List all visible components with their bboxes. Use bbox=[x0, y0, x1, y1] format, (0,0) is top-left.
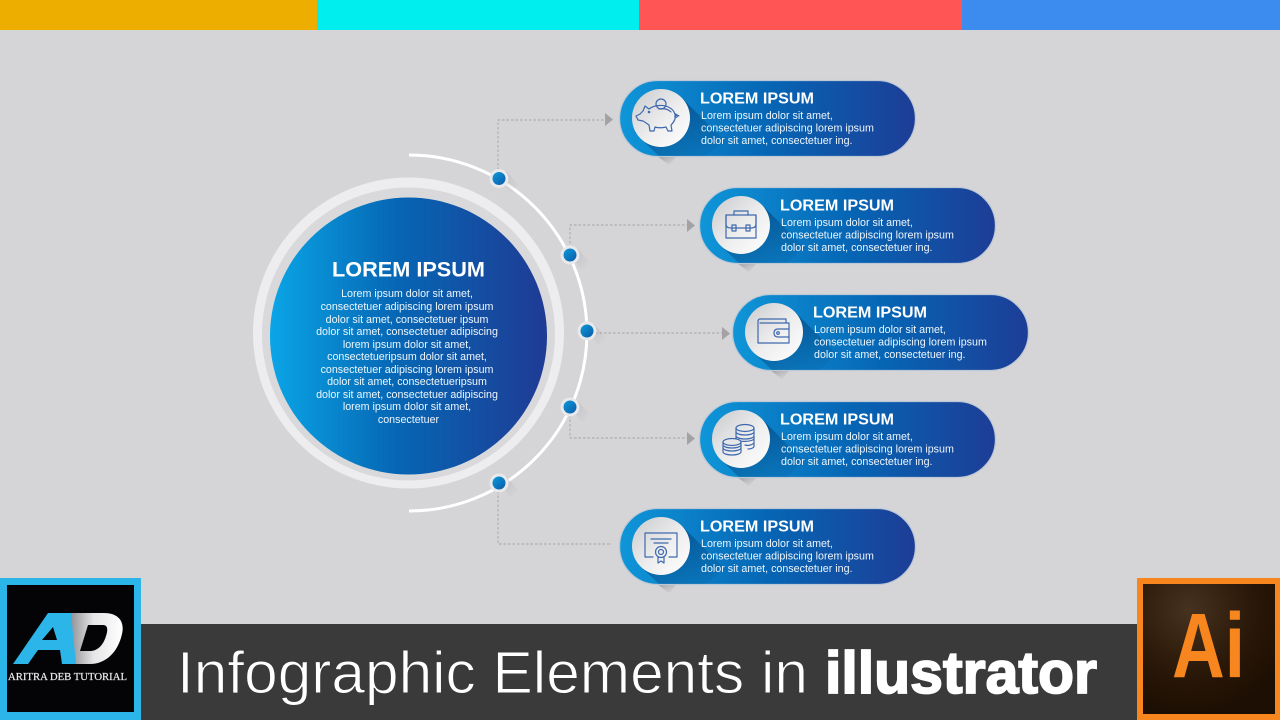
icon: coins bbox=[723, 424, 754, 455]
central body text: consectetuer bbox=[378, 414, 440, 426]
central body text: lorem ipsum dolor sit amet, bbox=[343, 339, 471, 351]
top colour strip bbox=[0, 0, 1280, 30]
icon: wallet bbox=[758, 319, 789, 343]
connector arrow 1 bbox=[498, 113, 613, 170]
central body text: consectetuer adipiscing lorem ipsum bbox=[321, 301, 494, 313]
heading: LOREM IPSUM bbox=[700, 518, 814, 536]
body text: dolor sit amet, consectetuer ing. bbox=[781, 242, 932, 254]
central circle bbox=[253, 178, 564, 488]
node 3 bbox=[578, 322, 606, 346]
node 2 bbox=[560, 246, 589, 270]
node 4 bbox=[560, 398, 589, 422]
body text: consectetuer adipiscing lorem ipsum bbox=[814, 336, 987, 348]
body text: dolor sit amet, consectetuer ing. bbox=[781, 456, 932, 468]
body text: Lorem ipsum dolor sit amet, bbox=[781, 431, 913, 443]
logo letter A bbox=[13, 613, 76, 664]
connector arrow 3 bbox=[595, 327, 730, 340]
footer title bar bbox=[141, 624, 1137, 720]
heading: LOREM IPSUM bbox=[780, 412, 894, 428]
body text: dolor sit amet, consectetuer ing. bbox=[814, 349, 965, 361]
central body text: consectetueripsum dolor sit amet, bbox=[327, 351, 487, 363]
body text: Lorem ipsum dolor sit amet, bbox=[701, 538, 833, 550]
white arc bbox=[409, 155, 587, 511]
panel: item 1 bbox=[620, 80, 916, 165]
heading: LOREM IPSUM bbox=[700, 90, 814, 108]
logo letters Ai: Ai bbox=[1172, 595, 1245, 697]
body text: consectetuer adipiscing lorem ipsum bbox=[781, 230, 954, 242]
icon: piggy bank bbox=[636, 99, 679, 131]
body text: dolor sit amet, consectetuer ing. bbox=[701, 563, 852, 575]
panel: item 2 bbox=[700, 188, 996, 272]
central body text: dolor sit amet, consectetuer adipiscing bbox=[316, 326, 498, 338]
body text: Lorem ipsum dolor sit amet, bbox=[701, 110, 833, 122]
logo: Adobe Illustrator bbox=[1137, 578, 1280, 720]
heading: LOREM IPSUM bbox=[813, 304, 927, 322]
central body text: dolor sit amet, consectetuer ipsum bbox=[326, 314, 488, 326]
connector arrow 4 bbox=[570, 415, 695, 445]
body text: Lorem ipsum dolor sit amet, bbox=[781, 217, 913, 229]
body text: dolor sit amet, consectetuer ing. bbox=[701, 135, 852, 147]
logo letter D bbox=[70, 613, 123, 664]
connector line 5 bbox=[498, 491, 612, 544]
node 1 bbox=[490, 169, 518, 193]
central body text: dolor sit amet, consectetuer adipiscing bbox=[316, 389, 498, 401]
central body text: consectetuer adipiscing lorem ipsum bbox=[321, 364, 494, 376]
panel: item 4 bbox=[700, 402, 996, 486]
body text: consectetuer adipiscing lorem ipsum bbox=[701, 122, 874, 134]
heading: LOREM IPSUM bbox=[780, 198, 894, 214]
logo: Aritra Deb Tutorial bbox=[0, 578, 141, 720]
central heading: LOREM IPSUM bbox=[332, 258, 485, 282]
body text: Lorem ipsum dolor sit amet, bbox=[814, 324, 946, 336]
logo caption: ARITRA DEB TUTORIAL bbox=[8, 672, 127, 683]
node 5 bbox=[490, 474, 518, 498]
body text: consectetuer adipiscing lorem ipsum bbox=[781, 444, 954, 456]
inner ring bbox=[262, 188, 555, 480]
panel: item 5 bbox=[620, 508, 916, 593]
icon: certificate bbox=[645, 533, 677, 563]
central body text: dolor sit amet, consectetueripsum bbox=[327, 376, 487, 388]
panel: item 3 bbox=[732, 294, 1028, 379]
blue disc bbox=[270, 198, 547, 474]
footer title: Infographic Elements in bbox=[177, 640, 808, 706]
connector arrow 2 bbox=[570, 219, 695, 248]
central body text: Lorem ipsum dolor sit amet, bbox=[341, 288, 473, 300]
central body text: lorem ipsum dolor sit amet, bbox=[343, 401, 471, 413]
icon: briefcase bbox=[726, 211, 756, 238]
body text: consectetuer adipiscing lorem ipsum bbox=[701, 550, 874, 562]
outer ring bbox=[253, 178, 564, 488]
footer title bold: illustrator bbox=[825, 640, 1097, 706]
